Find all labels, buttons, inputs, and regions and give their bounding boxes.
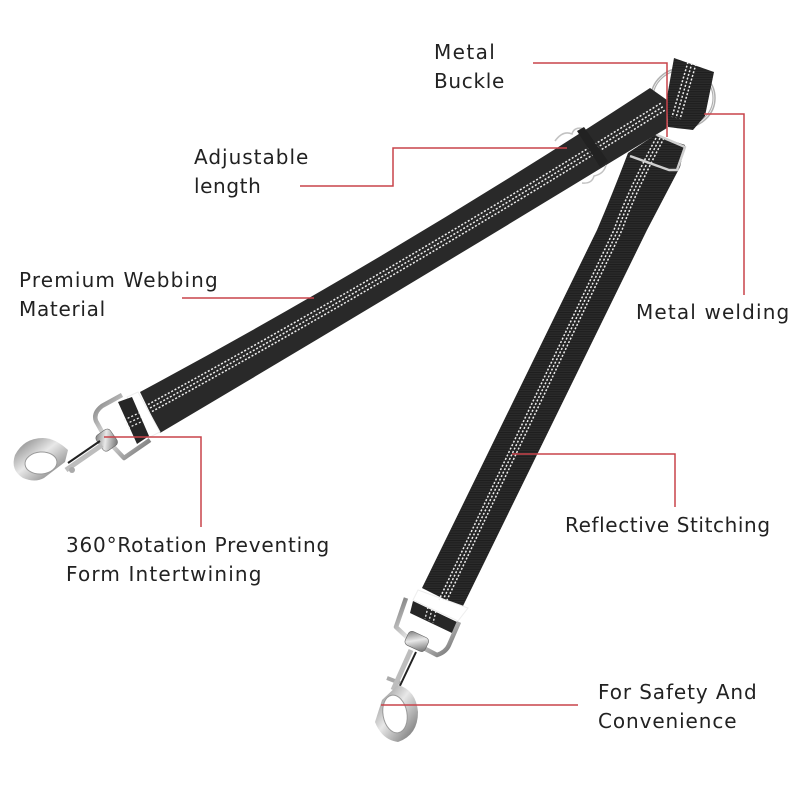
label: metal welding: Metal welding xyxy=(636,300,790,324)
label: adjustable length: length xyxy=(194,174,261,198)
top metal ring xyxy=(651,68,715,128)
label: 360 rotation: Form Intertwining xyxy=(66,562,263,586)
label: metal buckle: Metal xyxy=(434,40,496,64)
leash product xyxy=(14,58,715,742)
swivel xyxy=(94,427,119,453)
buckle loop webbing xyxy=(410,601,457,633)
label: premium webbing material: Premium Webbing xyxy=(19,268,219,292)
label: safety and convenience: For Safety And xyxy=(598,680,758,704)
callout lines xyxy=(104,63,744,705)
bottom snap hook xyxy=(375,598,459,742)
hook xyxy=(14,438,68,480)
left strap xyxy=(127,88,667,438)
shaft xyxy=(66,445,102,470)
label: premium webbing material: Material xyxy=(19,297,106,321)
label: safety and convenience: Convenience xyxy=(598,709,737,733)
right strap xyxy=(413,135,685,621)
buckle frame xyxy=(95,395,150,458)
left snap hook xyxy=(14,395,150,480)
buckle loop webbing xyxy=(118,397,149,444)
buckle frame xyxy=(396,598,459,655)
label: adjustable length: Adjustable xyxy=(194,145,309,169)
hook xyxy=(375,685,418,742)
swivel xyxy=(404,630,430,653)
top loop of webbing xyxy=(667,58,714,130)
label: reflective stitching: Reflective Stitching xyxy=(565,513,771,537)
strap slider buckle xyxy=(630,135,685,170)
label: 360 rotation: 360°Rotation Preventing xyxy=(66,533,330,557)
strap adjuster xyxy=(555,127,608,183)
shaft xyxy=(387,678,400,683)
label: metal buckle: Buckle xyxy=(434,69,505,93)
